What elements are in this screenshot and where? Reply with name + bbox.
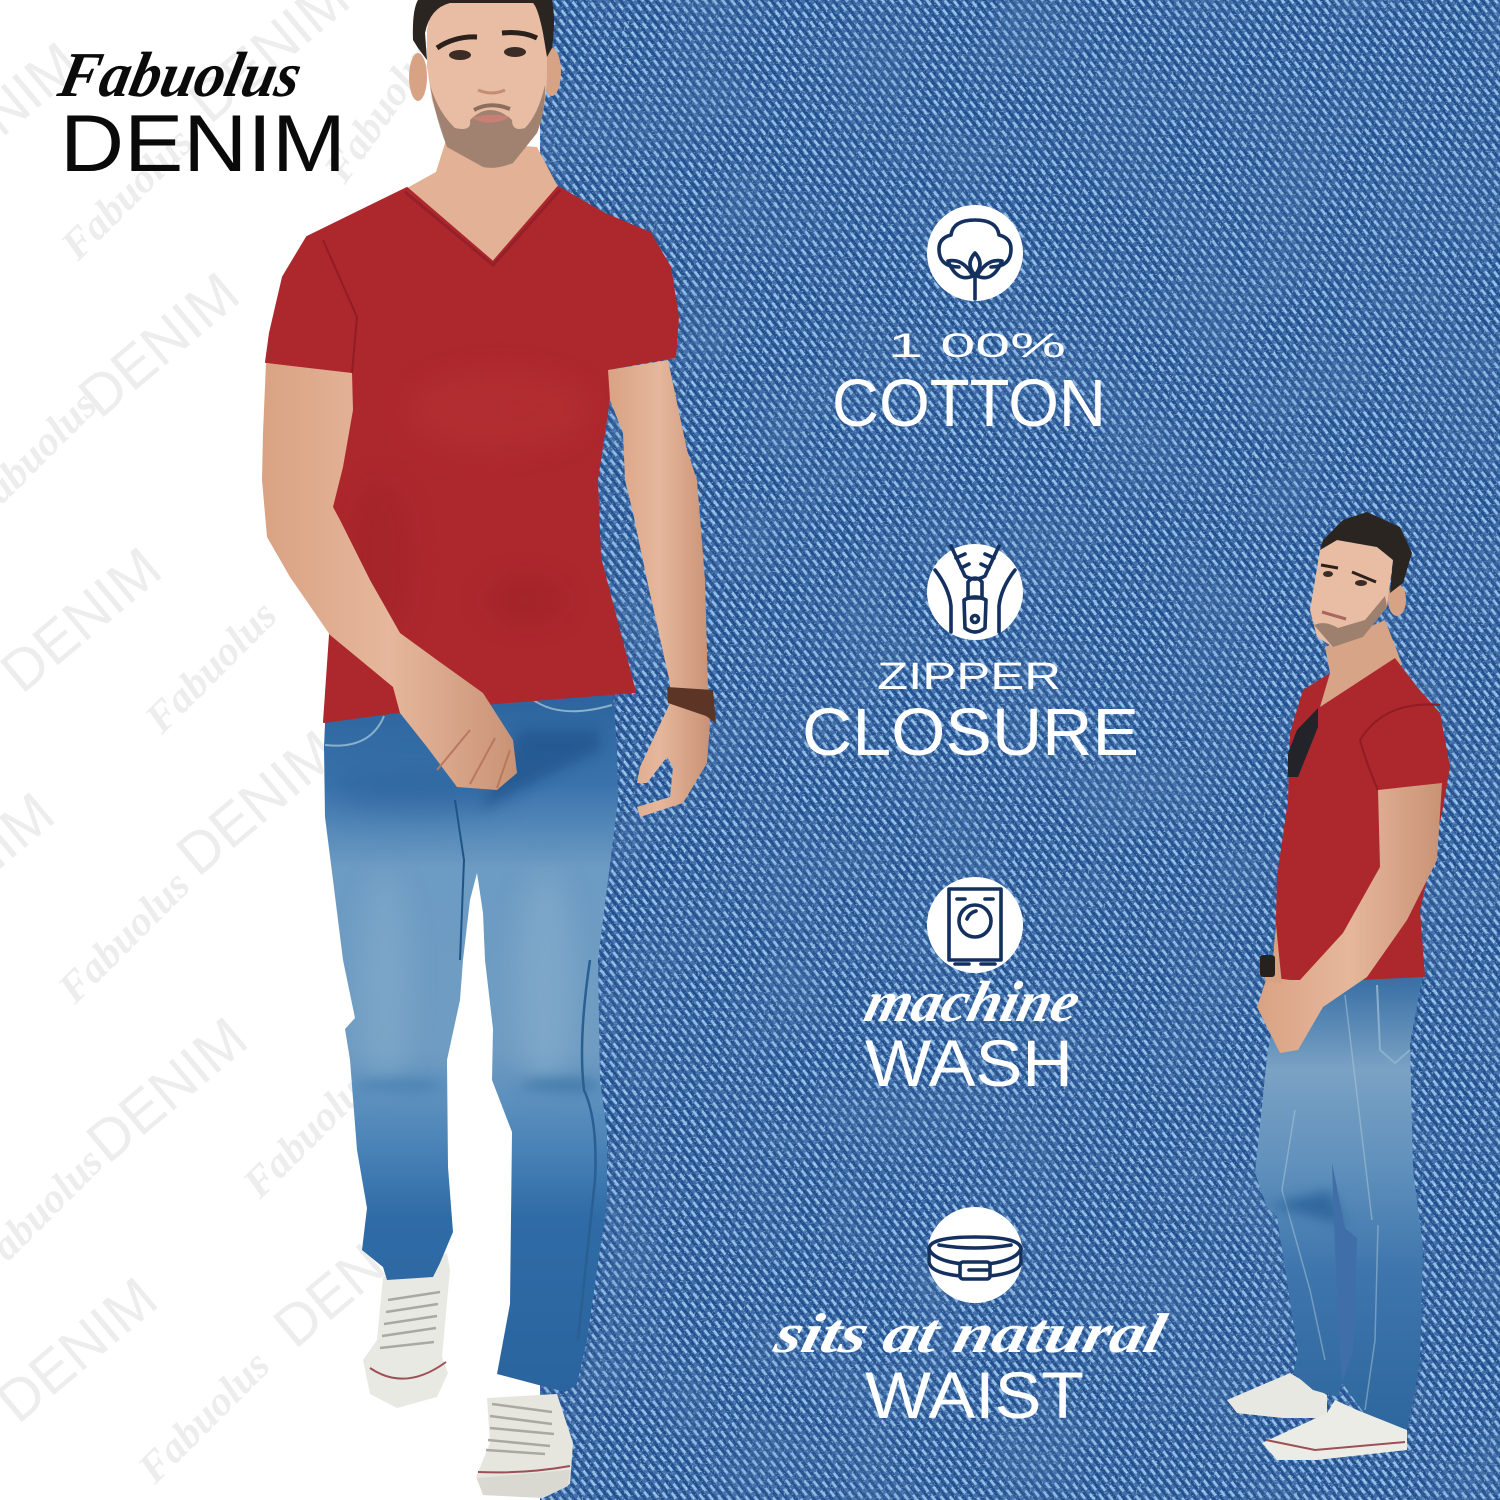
icon: zipper	[927, 544, 1023, 640]
text: cotton: COTTON	[832, 366, 1106, 441]
head	[1310, 512, 1412, 647]
watermark pattern: Fabuolus	[129, 1342, 279, 1493]
feature: machine wash	[859, 877, 1087, 1100]
side view model	[1227, 512, 1450, 1460]
watermark pattern	[0, 0, 448, 1493]
sunglasses	[1288, 708, 1318, 777]
denim fabric panel	[540, 0, 1500, 1500]
watermark pattern: Fabuolus	[49, 862, 199, 1013]
watermark pattern: Fabuolus	[52, 119, 202, 270]
left arm and hand	[262, 363, 517, 790]
red t-shirt	[266, 187, 678, 722]
text: sits at natural: sits at natural	[768, 1303, 1173, 1365]
logo script: Fabuolus: Fabuolus	[52, 39, 308, 110]
main model walking	[262, 0, 716, 1498]
logo wordmark: DENIM: DENIM	[60, 99, 346, 189]
right arm and hand	[608, 360, 710, 817]
watermark pattern: Fabuolus	[136, 592, 286, 743]
neck	[407, 140, 558, 262]
icon: belt	[927, 1207, 1023, 1303]
left sneaker	[363, 1253, 450, 1408]
text: machine: machine	[859, 970, 1087, 1034]
feature: 100% cotton	[832, 205, 1106, 441]
wristwatch	[667, 687, 716, 723]
arm and hand	[1257, 783, 1442, 1053]
text: zipper: ZIPPER	[877, 656, 1061, 698]
text: wash: WASH	[865, 1026, 1073, 1100]
watermark pattern: DENIM	[75, 1005, 260, 1175]
icon: washing machine	[927, 877, 1023, 973]
text: waist: WAIST	[865, 1358, 1084, 1432]
feature: zipper closure	[802, 544, 1139, 770]
jeans	[324, 680, 618, 1392]
rear sneaker	[1227, 1373, 1327, 1418]
watermark pattern: DENIM	[165, 718, 350, 888]
text: closure: CLOSURE	[802, 695, 1139, 770]
logo: Fabuolus Denim	[52, 39, 346, 189]
red t-shirt	[1275, 658, 1450, 983]
right sneaker	[476, 1394, 573, 1498]
watermark pattern: DENIM	[262, 1190, 447, 1360]
jeans	[1255, 968, 1424, 1430]
icon: cotton boll	[927, 205, 1023, 301]
text: 100%: 1 00%	[888, 327, 1066, 365]
neck	[1318, 620, 1402, 712]
watermark pattern: DENIM	[67, 260, 252, 430]
front sneaker	[1262, 1400, 1407, 1460]
watermark pattern: Fabuolus	[315, 29, 448, 192]
feature: sits at natural waist	[768, 1207, 1173, 1432]
head	[409, 0, 561, 168]
watermark pattern: Fabuolus	[234, 1057, 384, 1208]
